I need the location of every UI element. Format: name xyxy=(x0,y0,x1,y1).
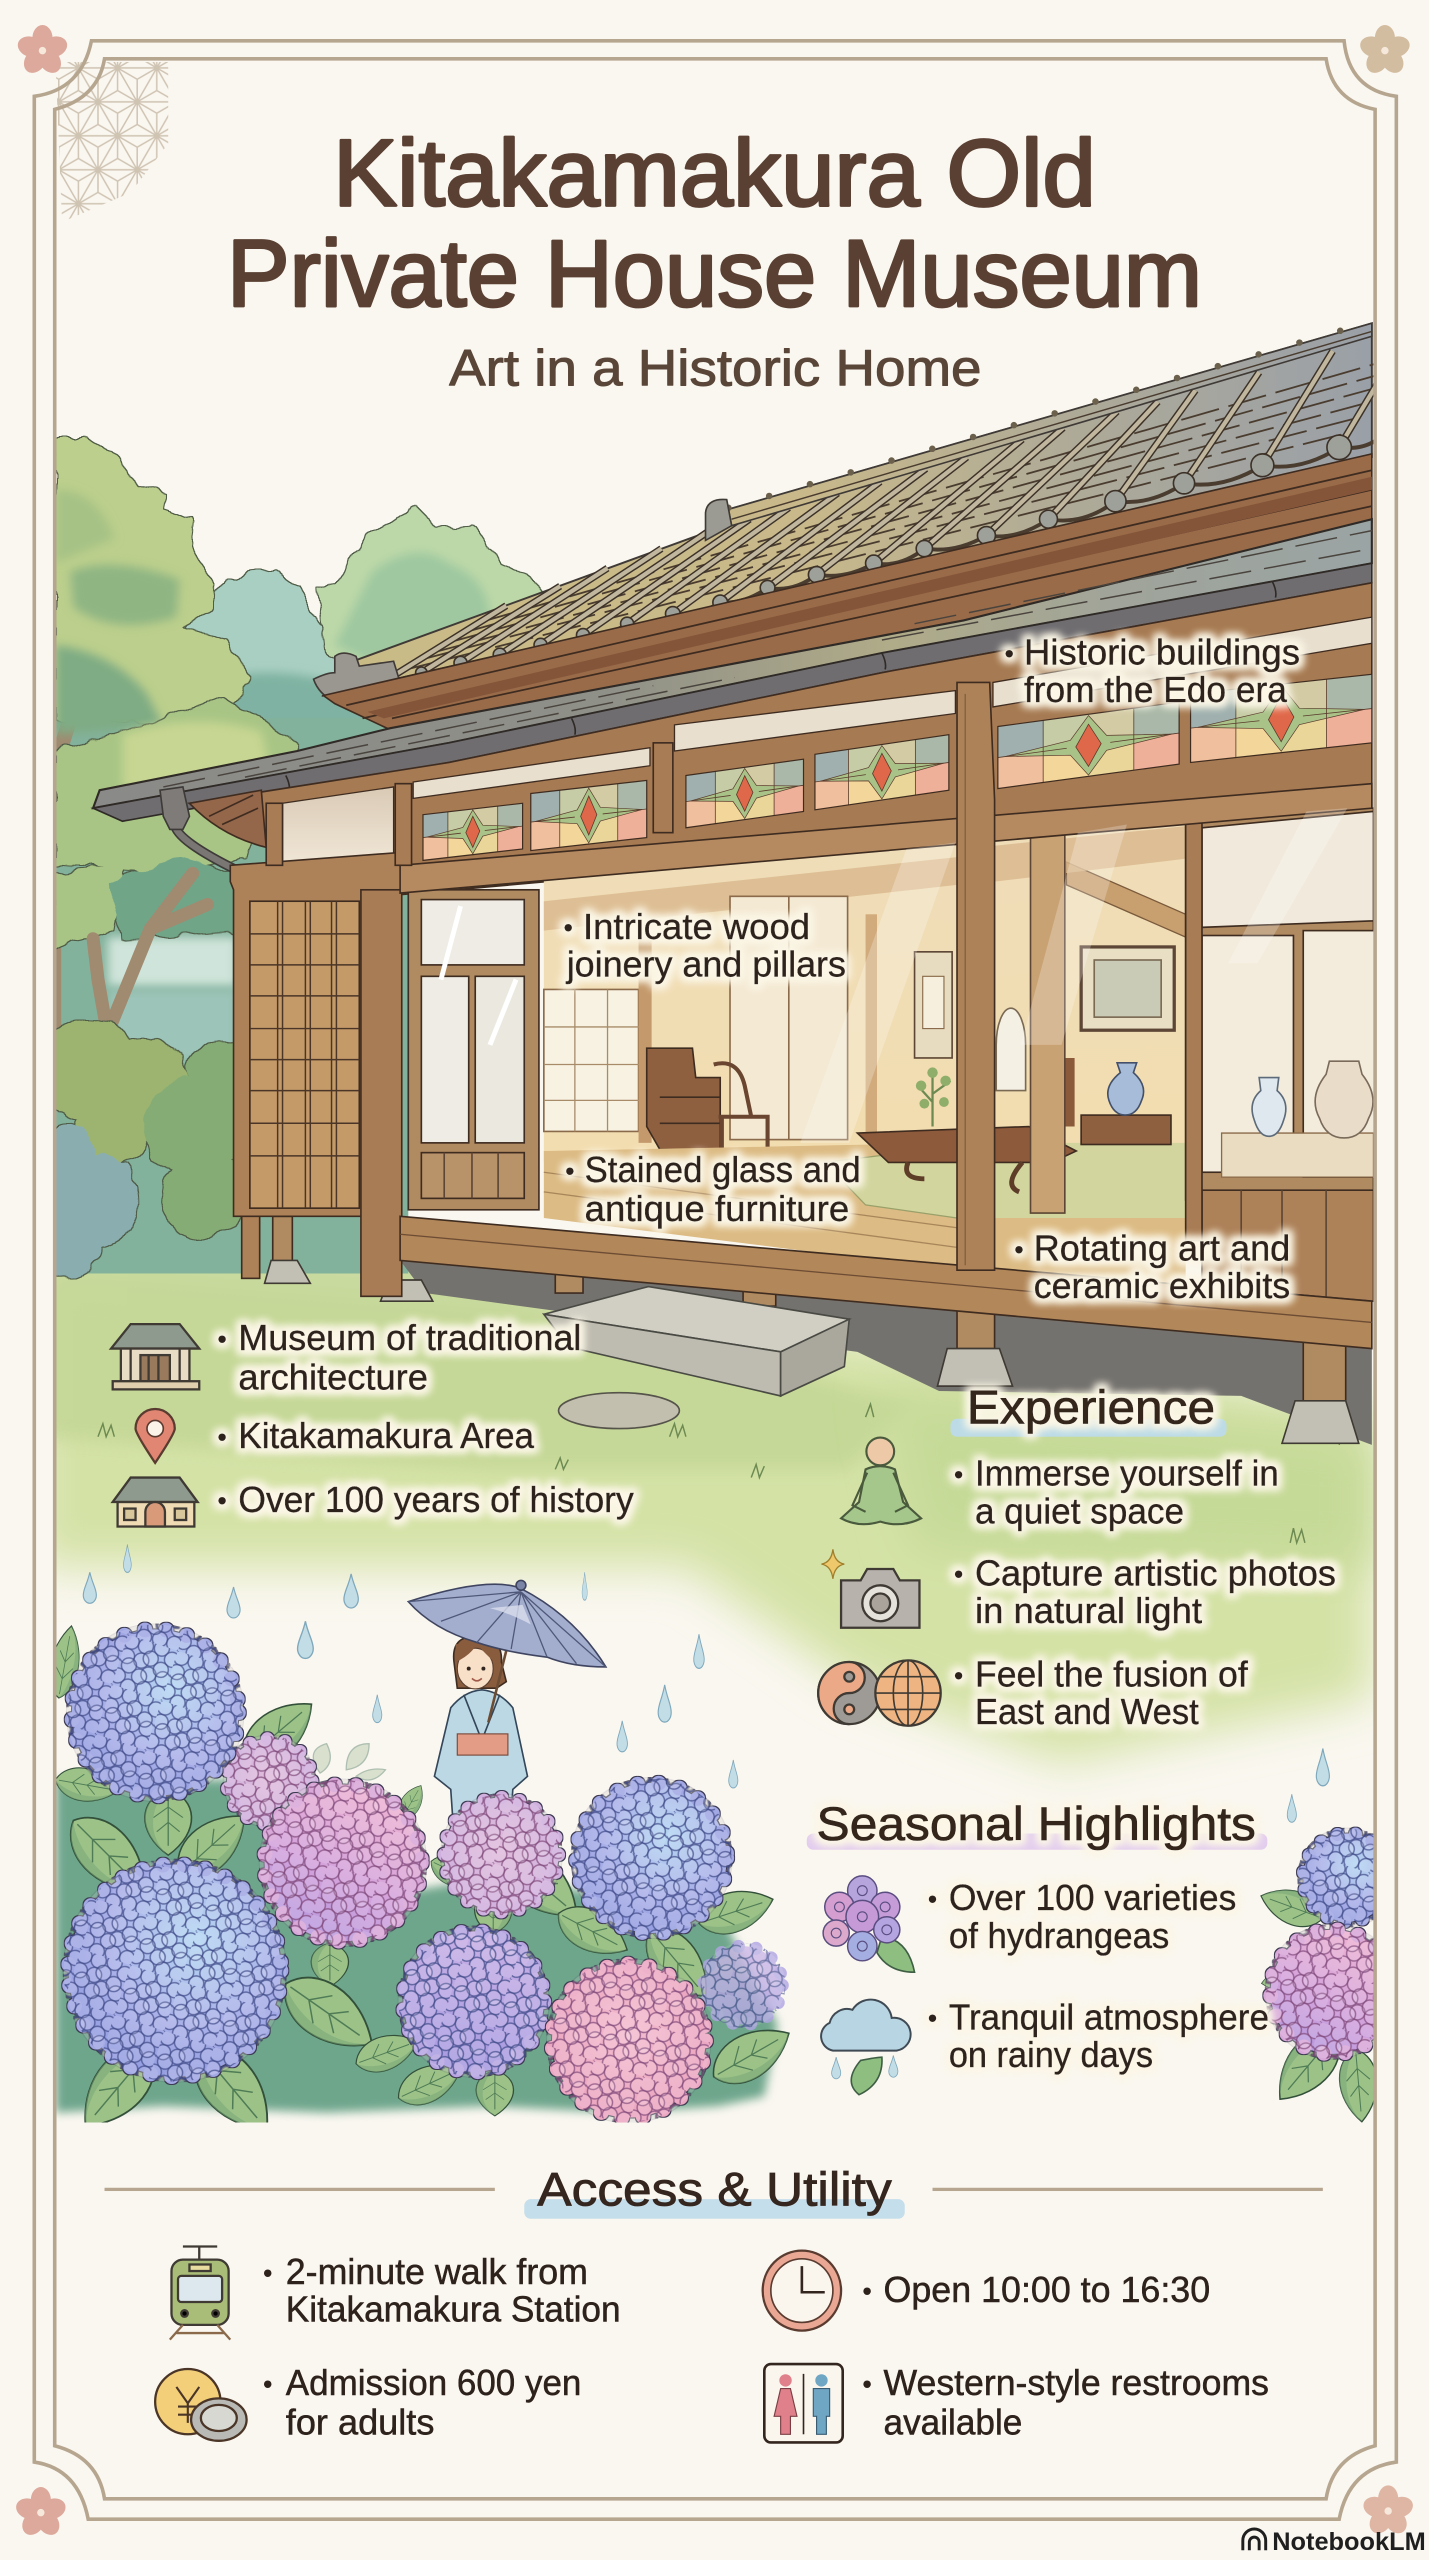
experience: artistic photos: • xyxy=(954,1559,963,1590)
seasonal: hydrangea varieties: of hydrangeas xyxy=(949,1915,1169,1956)
heading: experience: Experience xyxy=(967,1382,1215,1435)
house: lower eave roof xyxy=(93,519,1372,821)
callout: historic buildings xyxy=(1004,631,1300,710)
seasonal: tranquil atmosphere xyxy=(928,1996,1269,2075)
house: underfloor shadow xyxy=(400,1260,1372,1445)
experience: east and west: • xyxy=(954,1660,963,1691)
house: upper roof gable end tile xyxy=(312,652,400,695)
experience: east and west xyxy=(954,1654,1249,1732)
access: restrooms: Western-style restrooms xyxy=(884,2362,1269,2403)
icon: camera with sparkle xyxy=(821,1549,919,1628)
corner blossom bottom right xyxy=(1361,2485,1416,2538)
stepping stone xyxy=(559,1393,679,1429)
experience: quiet space: Immerse yourself in xyxy=(975,1453,1279,1494)
low table and plant xyxy=(857,1067,1076,1192)
access: opening hours: • xyxy=(862,2275,872,2306)
decorative asanoha corner pattern xyxy=(56,62,168,222)
right window xyxy=(1186,808,1375,1301)
info: over 100 years of history: • xyxy=(217,1485,227,1516)
hydrangea bush foliage xyxy=(45,1624,800,2147)
access: admission price: Admission 600 yen xyxy=(286,2362,581,2403)
title: Kitakamakura Old xyxy=(333,121,1096,227)
inner pillar xyxy=(1031,824,1065,1213)
info: over 100 years of history: Over 100 years of history xyxy=(238,1479,634,1520)
icon: yen coins xyxy=(155,2369,247,2441)
icon: meditating figure xyxy=(841,1438,921,1524)
heading: seasonal highlights: Seasonal Highlights xyxy=(817,1798,1256,1851)
info: kitakamakura area: • xyxy=(217,1422,227,1453)
callout: historic buildings: • xyxy=(1004,638,1014,669)
section rule left xyxy=(105,2188,495,2191)
access: walk from station: • xyxy=(263,2257,273,2288)
NotebookLM watermark: NotebookLM xyxy=(1272,2528,1426,2556)
icon: rain cloud xyxy=(821,2000,911,2095)
left window xyxy=(408,890,539,1210)
house: upper tiled roof xyxy=(323,322,1409,696)
callout: wood joinery xyxy=(563,906,846,984)
callout: rotating art xyxy=(1014,1227,1290,1306)
experience: quiet space: a quiet space xyxy=(975,1490,1184,1531)
heading: access and utility: Access & Utility xyxy=(537,2164,892,2217)
access: walk from station: 2-minute walk from xyxy=(286,2251,588,2292)
icon: old house xyxy=(113,1478,198,1527)
callout: historic buildings: from the Edo era xyxy=(1024,669,1287,710)
experience: artistic photos: in natural light xyxy=(975,1590,1202,1631)
interior room left xyxy=(543,845,956,1162)
icon: train xyxy=(170,2247,230,2340)
icon: museum building xyxy=(111,1324,199,1389)
seasonal: tranquil atmosphere: • xyxy=(928,2003,937,2034)
corner blossom bottom left xyxy=(13,2487,68,2539)
callout: stained glass xyxy=(565,1149,861,1229)
callout: rotating art: Rotating art and xyxy=(1034,1227,1290,1268)
woman with umbrella xyxy=(408,1580,606,1837)
floor sill beam xyxy=(400,1216,1372,1349)
subtitle: Art in a Historic Home xyxy=(449,339,982,396)
callout: wood joinery: • xyxy=(563,912,573,943)
info: museum of traditional architecture: architecture xyxy=(238,1356,428,1397)
title: Private House Museum xyxy=(227,221,1202,327)
icon: clock xyxy=(763,2251,841,2331)
experience: quiet space: • xyxy=(954,1459,963,1490)
callout: wood joinery: Intricate wood xyxy=(583,906,810,947)
info: museum of traditional architecture: • xyxy=(217,1324,227,1355)
upper pillars xyxy=(266,743,673,865)
callout: stained glass: antique furniture xyxy=(585,1188,849,1229)
background trees xyxy=(56,508,547,1273)
access: walk from station: Kitakamakura Station xyxy=(286,2289,621,2330)
antique chest and chair xyxy=(647,1048,768,1153)
seasonal: hydrangea varieties: • xyxy=(928,1884,937,1915)
experience: east and west: Feel the fusion of xyxy=(975,1654,1249,1695)
callout: wood joinery: joinery and pillars xyxy=(566,943,846,984)
access: restrooms xyxy=(862,2362,1269,2442)
main pillar xyxy=(957,682,995,1270)
seasonal: hydrangea varieties xyxy=(928,1877,1236,1956)
callout: stained glass: Stained glass and xyxy=(585,1149,861,1190)
scene: garden and house illustration xyxy=(29,322,1409,2147)
house: white frieze strips xyxy=(283,617,1372,862)
house: foundation posts and stones xyxy=(265,1216,1359,1443)
seasonal: tranquil atmosphere: on rainy days xyxy=(949,2034,1153,2075)
icon: hydrangea flower xyxy=(823,1876,915,1972)
access: walk from station xyxy=(263,2251,621,2330)
section rule right xyxy=(933,2188,1323,2191)
icon: yin yang and globe xyxy=(818,1660,941,1726)
access: admission price: for adults xyxy=(286,2401,434,2442)
garden bushes xyxy=(56,1020,241,1280)
stained glass transom panels xyxy=(423,674,1372,860)
house: upper roof fascia xyxy=(323,454,1372,730)
interior room right xyxy=(995,816,1186,1287)
house: under eave rafters xyxy=(189,790,266,847)
access: admission price: • xyxy=(263,2368,273,2399)
experience: artistic photos xyxy=(954,1552,1336,1631)
hydrangea blooms left group xyxy=(64,1624,786,2122)
title xyxy=(227,121,1202,327)
seasonal: hydrangea varieties: Over 100 varieties xyxy=(949,1877,1236,1918)
callout: stained glass: • xyxy=(565,1155,575,1186)
grass lawn wash xyxy=(33,1216,1373,1763)
callout: rotating art: ceramic exhibits xyxy=(1034,1265,1290,1306)
icon: restrooms xyxy=(764,2364,843,2442)
front left tree xyxy=(54,438,297,1045)
experience: artistic photos: Capture artistic photos xyxy=(975,1552,1336,1593)
seasonal: tranquil atmosphere: Tranquil atmosphere xyxy=(949,1996,1269,2037)
main lintel beam xyxy=(400,784,1372,893)
sunlight beams on glass xyxy=(800,808,1347,1143)
experience: quiet space xyxy=(954,1453,1279,1531)
callout: historic buildings: Historic buildings xyxy=(1024,631,1300,672)
rain drops xyxy=(83,1544,1329,1822)
floor and tatami xyxy=(544,1143,957,1270)
access: opening hours: Open 10:00 to 16:30 xyxy=(884,2269,1210,2310)
lattice shutter box xyxy=(230,852,403,1296)
access: admission price xyxy=(263,2362,581,2442)
info: kitakamakura area: Kitakamakura Area xyxy=(238,1415,534,1456)
callout: rotating art: • xyxy=(1014,1234,1024,1265)
corner blossom top right xyxy=(1357,25,1412,77)
info: museum of traditional architecture xyxy=(217,1317,581,1397)
experience: east and west: East and West xyxy=(975,1691,1199,1732)
info: museum of traditional architecture: Museum of traditional xyxy=(238,1317,581,1358)
drain pipe xyxy=(160,787,240,872)
access: restrooms: available xyxy=(884,2401,1022,2442)
hydrangea blooms right group xyxy=(1255,1829,1400,2123)
access: restrooms: • xyxy=(862,2368,872,2399)
icon: map pin xyxy=(136,1409,175,1463)
corner blossom top left xyxy=(15,25,70,77)
stone step xyxy=(544,1287,849,1396)
house: transom wall band xyxy=(189,583,1372,895)
